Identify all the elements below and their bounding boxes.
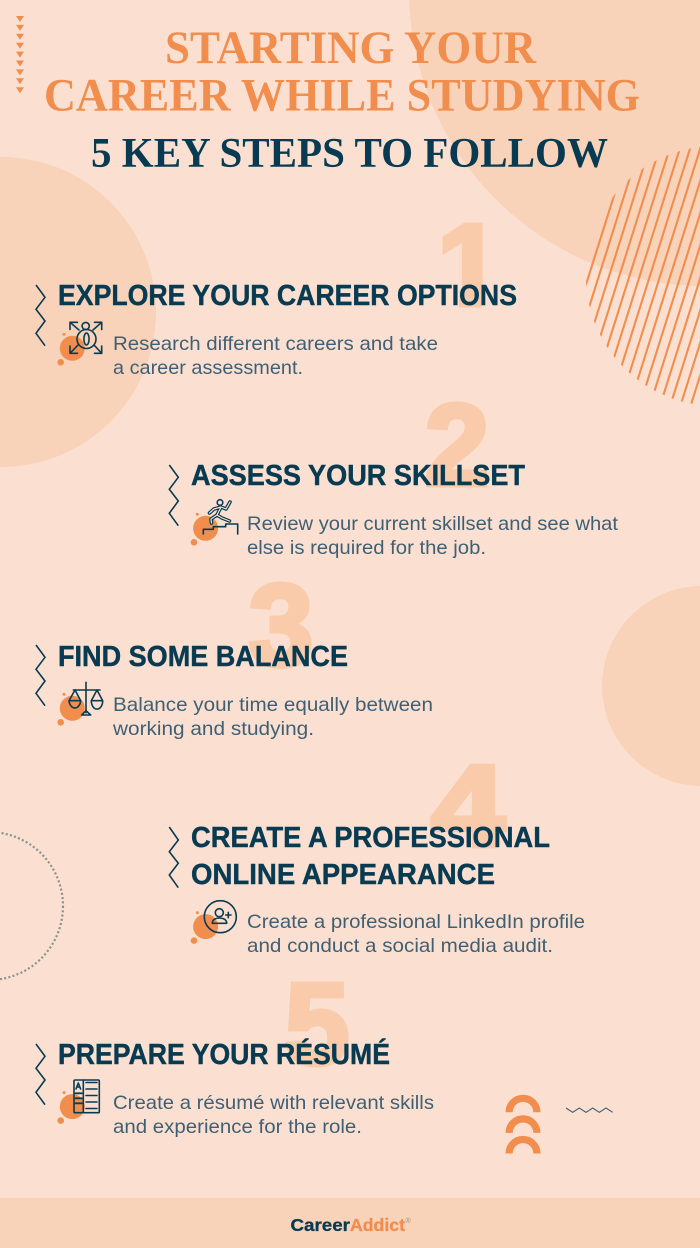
description: step 1: Research different careers and take	[113, 333, 438, 355]
step 2	[169, 460, 619, 559]
orange dots	[191, 513, 218, 546]
step 1: a career assessment.	[113, 357, 303, 379]
step 2: else is required for the job.	[247, 537, 486, 559]
step numbers: 2	[425, 380, 489, 510]
step 1	[36, 280, 517, 379]
title	[44, 22, 640, 177]
step 4	[169, 822, 585, 957]
icon: balance scales	[69, 682, 103, 715]
heading: step 4: CREATE A PROFESSIONAL	[191, 822, 550, 854]
orange dots	[57, 693, 85, 726]
step numbers: 3	[249, 560, 313, 690]
decorative circle: right	[602, 586, 700, 786]
logo: CareerAddict: ®	[406, 1217, 412, 1225]
footer band	[0, 1198, 700, 1248]
step 4: ONLINE APPEARANCE	[191, 859, 495, 891]
decorative wave	[566, 1108, 613, 1112]
step 4: and conduct a social media audit.	[247, 935, 553, 957]
heading: step 2: ASSESS YOUR SKILLSET	[191, 460, 525, 492]
step 3: working and studying.	[112, 718, 314, 740]
decorative striped circle	[586, 147, 700, 404]
step numbers: 4	[431, 741, 505, 871]
zigzag marker	[169, 465, 178, 526]
icon: add contact	[204, 901, 236, 933]
orange dots	[57, 333, 85, 366]
title: STARTING YOUR	[165, 22, 537, 74]
description: step 2: Review your current skillset and see what	[247, 513, 619, 535]
step numbers	[249, 200, 505, 1089]
zigzag marker	[36, 645, 45, 706]
description: step 3: Balance your time equally between	[113, 694, 433, 716]
logo: CareerAddict	[290, 1215, 412, 1235]
title: 5 KEY STEPS TO FOLLOW	[91, 131, 608, 177]
decorative triangles column	[16, 16, 24, 93]
description: step 4: Create a professional LinkedIn profile	[247, 911, 585, 933]
zigzag marker	[169, 827, 178, 888]
icon: runner climbing stairs	[203, 500, 238, 534]
decorative dotted circle	[0, 832, 63, 980]
decorative arches	[509, 1098, 537, 1154]
step numbers: 5	[285, 959, 349, 1089]
step 3	[36, 641, 433, 740]
step 5: and experience for the role.	[113, 1116, 362, 1138]
description: step 5: Create a résumé with relevant skills	[113, 1092, 434, 1114]
orange dots	[57, 1091, 85, 1124]
icon: person with arrows	[70, 322, 102, 353]
zigzag marker	[36, 285, 45, 346]
icon: resume document	[74, 1080, 99, 1113]
heading: step 5: PREPARE YOUR RÉSUMÉ	[58, 1037, 390, 1071]
zigzag marker	[36, 1044, 45, 1105]
step numbers: 1	[437, 200, 502, 330]
decorative circle: top right	[409, 0, 700, 286]
decorative circle: left	[0, 157, 156, 467]
step 5	[36, 1037, 434, 1138]
title: CAREER WHILE STUDYING	[44, 70, 640, 122]
logo: CareerAddict: Addict	[350, 1215, 405, 1235]
orange dots	[191, 911, 218, 944]
heading: step 3: FIND SOME BALANCE	[58, 641, 348, 673]
logo: CareerAddict: Career	[290, 1215, 350, 1235]
heading: step 1: EXPLORE YOUR CAREER OPTIONS	[58, 280, 517, 312]
